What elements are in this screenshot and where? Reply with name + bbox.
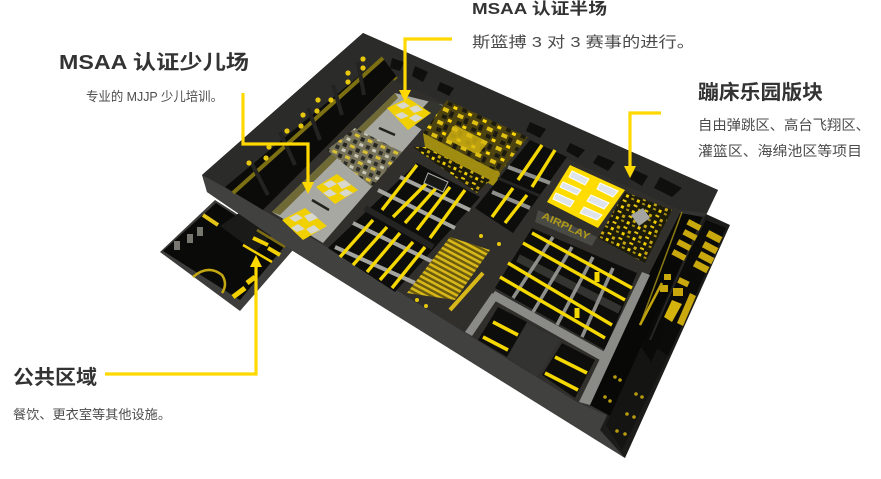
text: trampoline description: 灌篮区、海绵池区等项目: [698, 143, 862, 159]
trampoline block B: [475, 140, 567, 233]
upper play structure: [423, 100, 528, 188]
left black corridor with pillars: [225, 56, 397, 210]
text: half court description: 斯篮搏 3 对 3 赛事的进行。: [472, 33, 695, 51]
main building shell: [202, 33, 718, 458]
heading: public area: 公共区域: [13, 366, 97, 389]
foam pit strip: [413, 147, 490, 193]
ribbed yellow panel: [407, 234, 501, 310]
arrow: trampoline park: [624, 113, 661, 178]
pad cluster: lower court bottom: [282, 208, 327, 240]
foam pit: [598, 192, 672, 263]
arrow: public area: [105, 255, 262, 374]
text: trampoline description: 自由弹跳区、高台飞翔区、: [698, 117, 870, 133]
AIRPLAY ledge: [535, 210, 597, 246]
AIRPLAY ledge: AIRPLAY: [540, 211, 592, 243]
right annex and aisle: [590, 212, 730, 458]
top wall window panels: [390, 58, 682, 197]
left annex: public area: [160, 200, 293, 311]
floor: [263, 80, 680, 403]
MSAA court floor: [272, 93, 452, 243]
trampoline block A: [328, 163, 480, 292]
pad cluster: upper court: [387, 98, 431, 130]
text: trampoline description: [698, 117, 870, 159]
arrow: MSAA kids court: [243, 93, 314, 194]
small dark bars on court: [312, 128, 395, 210]
grey walkways: [465, 272, 650, 405]
arrow: MSAA half court: [399, 39, 452, 102]
heading: MSAA kids court: MSAA 认证少儿场: [59, 51, 249, 74]
yellow court with hoops: [547, 165, 625, 228]
text: kids court description: 专业的 MJJP 少儿培训。: [86, 89, 223, 104]
text: public area description: 餐饮、更衣室等其他设施。: [13, 407, 171, 422]
kids play structure: [327, 128, 402, 187]
trampoline block C: [495, 228, 637, 350]
heading: MSAA half court: MSAA 认证半场: [472, 0, 607, 18]
pad cluster: lower court middle: [316, 174, 358, 204]
lower trampoline boxes: [478, 307, 595, 398]
heading: trampoline park: 蹦床乐园版块: [698, 80, 823, 104]
